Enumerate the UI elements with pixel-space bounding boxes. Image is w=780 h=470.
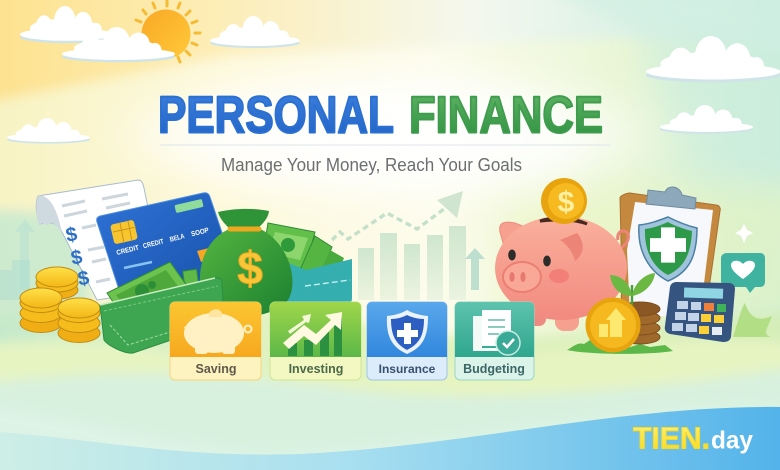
icon: receipt: $ xyxy=(69,246,84,270)
title xyxy=(158,86,603,144)
icon: piggy silhouette xyxy=(184,309,252,354)
icon: sun xyxy=(136,1,200,62)
subtitle: Manage Your Money, Reach Your Goals xyxy=(221,155,522,175)
clouds xyxy=(7,6,780,144)
tile: Insurance xyxy=(367,302,447,380)
logo: TIEN.day: TIEN. xyxy=(633,420,710,456)
tile: Saving xyxy=(170,302,261,380)
tile: Budgeting xyxy=(455,302,534,380)
title: PERSONAL xyxy=(158,86,394,144)
icon: calculator xyxy=(665,282,735,342)
icon: money bag: $ xyxy=(237,242,263,294)
icon: receipt: $ xyxy=(64,223,79,247)
tile: Saving: Saving xyxy=(196,362,236,376)
tile: Insurance: Insurance xyxy=(379,362,436,376)
tile: Investing xyxy=(270,302,361,380)
icon: receipt: $ xyxy=(76,267,91,291)
icon: receipt xyxy=(36,180,165,300)
icon: credit card: SOOP xyxy=(191,227,210,238)
icon: rising arrow over bars xyxy=(283,312,342,356)
icon: credit card xyxy=(97,193,238,305)
icon: documents with check xyxy=(473,310,520,355)
icon: teal wallet with bills xyxy=(262,223,352,306)
icon: piggy bank xyxy=(495,216,628,331)
icon: green wallet with bills xyxy=(100,262,224,353)
icon: shield xyxy=(387,310,428,354)
title: FINANCE xyxy=(409,86,603,144)
logo: TIEN.day: day xyxy=(711,426,753,454)
icon: heart chat bubble xyxy=(721,224,772,337)
icon: money bag xyxy=(200,209,292,316)
icon: credit card: CREDIT xyxy=(142,238,165,250)
faint growth chart xyxy=(0,191,485,300)
icon: credit card: BELA xyxy=(169,233,185,244)
tile: Budgeting: Budgeting xyxy=(463,362,525,376)
icon: coin stacks xyxy=(20,267,100,342)
logo: TIEN.day xyxy=(633,420,753,456)
icon: coin entering piggy bank xyxy=(541,178,587,224)
icon: coin with plant and grass xyxy=(567,273,673,354)
tile: Investing: Investing xyxy=(289,362,343,376)
icon: credit card: CREDIT xyxy=(116,244,140,257)
icon: clipboard with shield xyxy=(620,187,720,320)
icon: coin entering piggy bank: $ xyxy=(558,186,575,219)
